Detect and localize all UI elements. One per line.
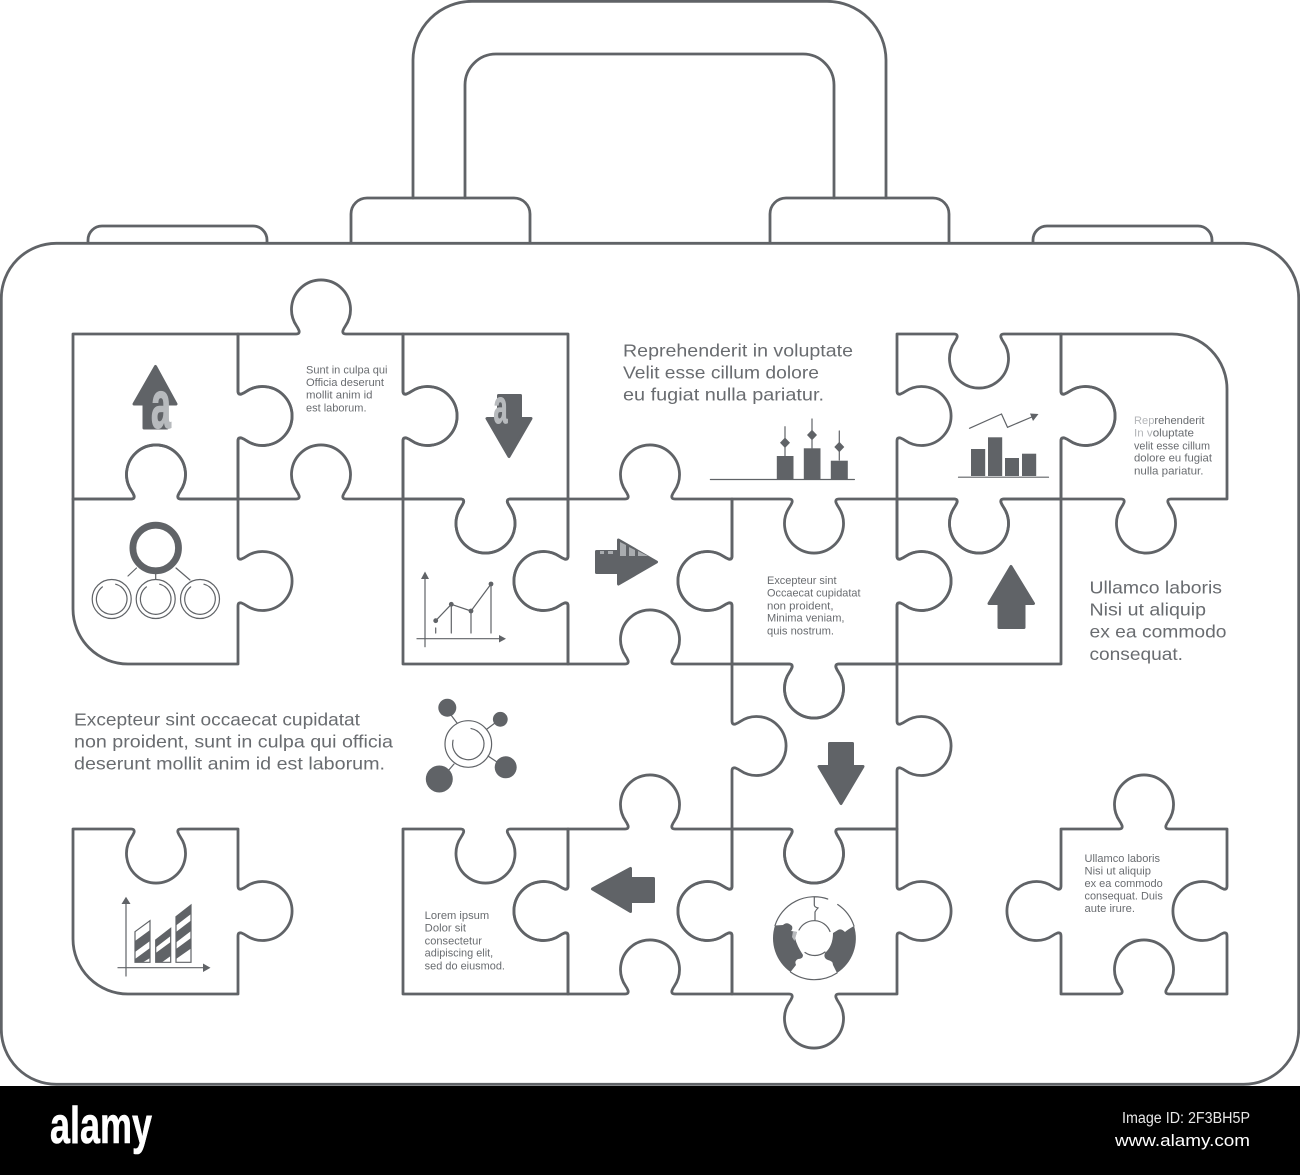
text: Excepteur sint: quis nostrum.	[767, 625, 834, 637]
text: Reprehenderit: dolore eu fugiat	[1134, 453, 1212, 465]
puzzle piece: line chart	[403, 499, 568, 664]
footer bar	[0, 1086, 1300, 1175]
text: Lorem ipsum: consectetur	[425, 935, 482, 947]
text block: Excepteur sint occaecat: non proident, sunt in culpa qui officia	[74, 732, 393, 752]
puzzle piece: bar chart	[897, 334, 1115, 553]
icon: up arrow	[989, 566, 1034, 628]
icon: network nodes	[426, 699, 517, 792]
left clasp	[351, 198, 530, 243]
puzzle piece: up arrow right	[897, 499, 1061, 664]
text block: Ullamco laboris: consequat.	[1090, 644, 1183, 664]
text: Reprehenderit: Reprehenderit	[1134, 415, 1205, 427]
text: Excepteur sint	[767, 575, 861, 637]
puzzle piece: down arrow	[403, 334, 568, 553]
text block: Reprehenderit in voluptate: Reprehenderit in voluptate	[623, 340, 853, 360]
right clasp	[770, 198, 949, 243]
puzzle piece: hierarchy	[73, 445, 292, 664]
text: Lorem ipsum	[425, 910, 505, 972]
icon: line chart	[417, 572, 506, 647]
text: Lorem ipsum: Dolor sit	[425, 923, 466, 935]
text: Sunt in culpa qui: mollit anim id	[306, 390, 373, 402]
footer url: www.alamy.com	[1114, 1131, 1250, 1150]
icon: right arrow	[596, 540, 656, 584]
text block: Ullamco laboris: Ullamco laboris	[1090, 577, 1222, 597]
text block: Ullamco laboris: Nisi ut aliquip	[1090, 600, 1206, 620]
text: Sunt in culpa qui: est laborum.	[306, 402, 366, 414]
text: Sunt in culpa qui: Officia deserunt	[306, 377, 384, 389]
text: Reprehenderit: velit esse cillum	[1134, 440, 1210, 452]
text block: Excepteur sint occaecat: Excepteur sint occaecat cupidatat	[74, 710, 360, 730]
puzzle piece: text Sunt in culpa	[238, 280, 457, 499]
text: Reprehenderit: In voluptate	[1134, 428, 1194, 440]
text: Lorem ipsum: adipiscing elit,	[425, 948, 493, 960]
text: Ullamco laboris small: ex ea commodo	[1084, 878, 1163, 890]
icon: up arrow	[134, 366, 176, 443]
text: Sunt in culpa qui	[306, 364, 388, 414]
text: Excepteur sint: Occaecat cupidatat	[767, 588, 861, 600]
handle inner	[465, 54, 834, 198]
text: Reprehenderit: nulla pariatur.	[1134, 465, 1204, 477]
puzzle piece: text Reprehenderit	[1061, 334, 1227, 553]
text: Ullamco laboris small	[1084, 853, 1163, 915]
text: Ullamco laboris small: consequat. Duis	[1084, 890, 1163, 902]
icon: candlestick bar chart	[710, 419, 854, 480]
text: Excepteur sint: non proident,	[767, 600, 834, 612]
text: Lorem ipsum: Lorem ipsum	[425, 910, 489, 922]
left foot tab	[88, 226, 267, 243]
text: Reprehenderit	[1134, 415, 1212, 477]
text: Lorem ipsum: sed do eiusmod.	[425, 960, 505, 972]
icon: puzzle donut chart	[773, 897, 856, 980]
icon: down arrow	[819, 744, 863, 804]
puzzle piece: text Lorem ipsum	[403, 829, 568, 994]
puzzle piece: right arrow	[514, 445, 732, 664]
icon: down arrow: a	[494, 380, 508, 433]
text: Sunt in culpa qui: Sunt in culpa qui	[306, 364, 388, 376]
text block: Reprehenderit in voluptate	[623, 340, 853, 404]
text: Ullamco laboris small: Ullamco laboris	[1084, 853, 1160, 865]
text block: Ullamco laboris	[1090, 577, 1227, 664]
text: Ullamco laboris small: aute irure.	[1084, 903, 1135, 915]
text: Excepteur sint: Excepteur sint	[767, 575, 837, 587]
text: Excepteur sint: Minima veniam,	[767, 613, 844, 625]
text block: Excepteur sint occaecat: deserunt mollit anim id est laborum.	[74, 754, 385, 774]
puzzle piece: up arrow	[73, 334, 292, 499]
footer image id: Image ID: 2F3BH5P	[1122, 1110, 1250, 1127]
text block: Excepteur sint occaecat	[74, 710, 393, 774]
icon: hierarchy circles	[92, 525, 220, 618]
right foot tab	[1033, 226, 1212, 243]
text block: Reprehenderit in voluptate: Velit esse cillum dolore	[623, 362, 819, 382]
puzzle piece: text Ullamco laboris	[1007, 775, 1227, 994]
text: Ullamco laboris small: Nisi ut aliquip	[1084, 865, 1151, 877]
icon: up arrow: a	[151, 367, 172, 443]
puzzle piece: text Excepteur sint	[678, 499, 951, 718]
puzzle piece: left arrow	[514, 775, 732, 994]
icon: striped bar chart	[118, 897, 210, 976]
text block: Reprehenderit in voluptate: eu fugiat nulla pariatur.	[623, 384, 824, 404]
icon: bar chart with trend arrow	[958, 414, 1048, 477]
puzzle piece: donut	[678, 829, 951, 1048]
handle outer	[413, 1, 886, 198]
suitcase body	[1, 243, 1299, 1084]
puzzle piece: down arrow lower	[732, 664, 951, 883]
icon: left arrow	[592, 868, 654, 912]
puzzle piece: stacked bar chart	[73, 829, 292, 994]
text block: Ullamco laboris: ex ea commodo	[1090, 622, 1227, 642]
footer logo: alamy	[50, 1097, 152, 1155]
icon: down arrow	[487, 380, 531, 456]
